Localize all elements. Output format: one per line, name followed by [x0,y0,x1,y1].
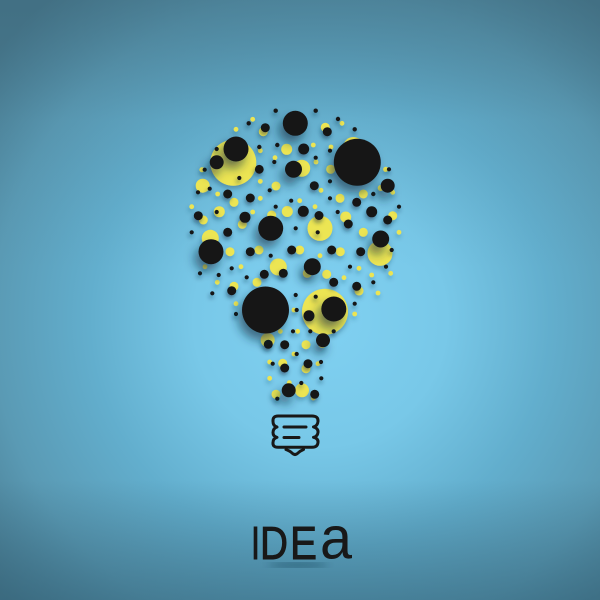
large black dots [198,111,395,397]
title: IDEa: a [320,504,353,572]
small black dots [190,108,401,401]
medium black dots [194,123,392,399]
title: IDEa: D [260,517,288,569]
title: IDEa: E [290,517,317,569]
title: IDEa [251,504,353,572]
icon: bulb base [273,416,318,454]
yellow dots [189,117,401,400]
title: IDEa: I [251,517,260,569]
ground shadow [268,562,328,568]
